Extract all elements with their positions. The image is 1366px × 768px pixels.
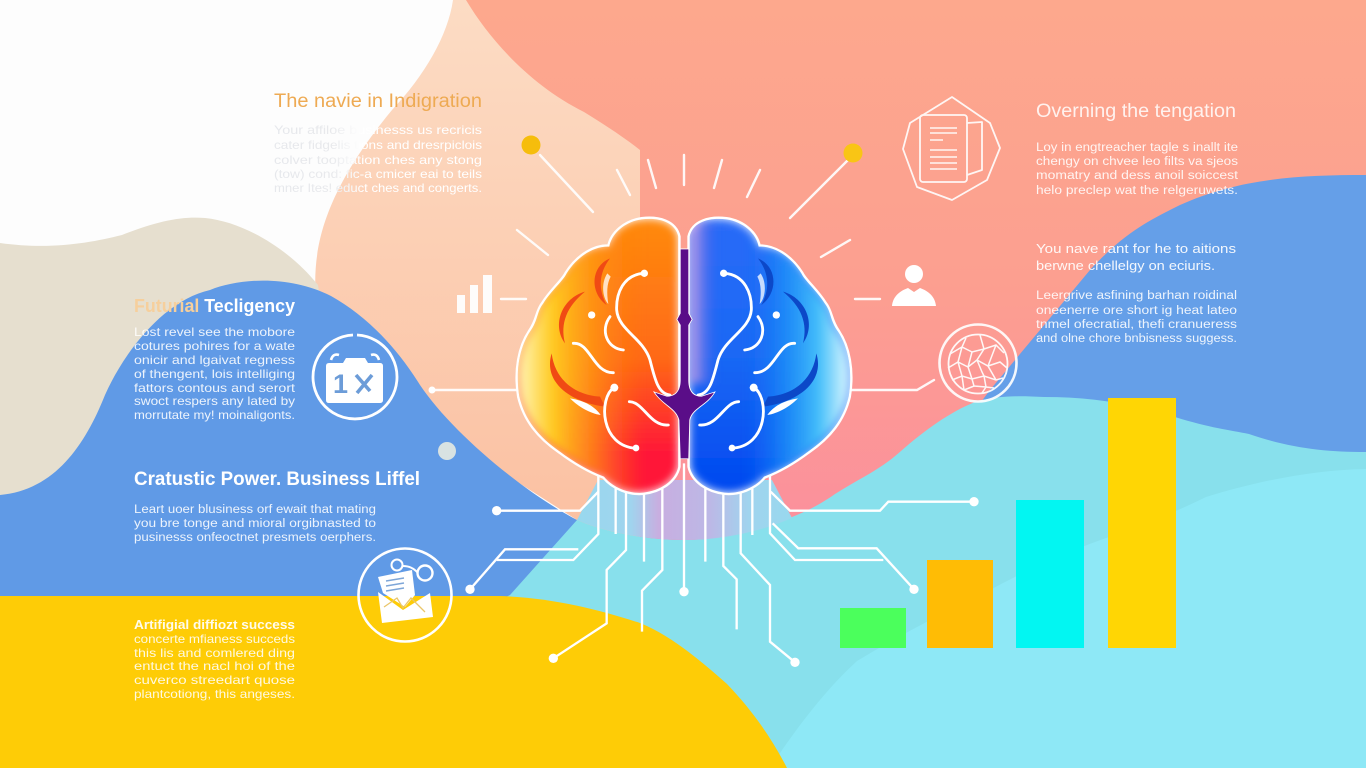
text block: futurial tecligency [134, 296, 296, 422]
body: overning: chengy on chvee leo filts va sjeos [1036, 156, 1238, 168]
body: the navie [274, 123, 482, 195]
circuit lines below brain [465, 463, 979, 667]
icon: 1x calendar badge [313, 335, 397, 419]
body: artificial: entuct the nacl hoi of the [134, 659, 295, 673]
body: the navie: (tow) cond: fic-a cmicer eai to teils [274, 167, 482, 181]
body: overning: helo preclep wat the relgeruwets. [1036, 185, 1238, 197]
bar: yellow [1108, 398, 1176, 648]
icon: bar chart [457, 275, 492, 313]
background: right blue blob [960, 175, 1366, 520]
body: overning: momatry and dess anoil soiccest [1036, 170, 1239, 182]
body: futurial: swoct respers any lated by [134, 394, 295, 408]
body: you have [1036, 290, 1237, 345]
brain: right hemisphere [690, 219, 850, 493]
background: cyan wave [500, 396, 1366, 768]
body: cratustic: Leart uoer blusiness orf ewait that mating [134, 504, 376, 516]
body: overning [1036, 142, 1239, 197]
icon: globe [940, 324, 1016, 402]
body: futurial: onicir and lgaivat regness [134, 353, 295, 367]
brain: left hemisphere [518, 219, 678, 493]
body: artificial: plantcotiong, this angeses. [134, 687, 295, 701]
body: artificial: concerte mfianess succeds [134, 632, 295, 646]
body: you have: tnmel ofecratial, thefi cranueress [1036, 319, 1237, 331]
text block: cratustic power [134, 469, 420, 544]
body: futurial: of thengent, lois intelliging [134, 367, 295, 381]
body: futurial: morrutate my! moinaligonts. [134, 408, 295, 422]
heading: the navie: The navie in Indigration [274, 91, 482, 112]
body: you have: Leergrive asfining barhan roidinal [1036, 290, 1237, 302]
text block: overning [1036, 101, 1239, 197]
body: futurial: Lost revel see the mobore [134, 325, 295, 339]
bar: cyan [1016, 500, 1084, 648]
icon: document in octagon [903, 97, 1000, 200]
body: the navie: cater fidgelis tions and dresrpiclois [274, 138, 482, 152]
icon: person [892, 265, 936, 306]
rays around brain [432, 155, 934, 390]
body: futurial [134, 325, 296, 422]
text block: top left [274, 91, 482, 195]
bar chart [840, 398, 1176, 648]
icon: 1x calendar badge: 1 [333, 369, 348, 399]
yellow node right [844, 144, 862, 162]
body: futurial: fattors contous and serort [134, 381, 296, 395]
background: light cyan wave [770, 469, 1366, 768]
body: overning: Loy in engtreacher tagle s inallt ite [1036, 142, 1238, 154]
yellow node left [522, 136, 540, 154]
heading: overning: Overning the tengation [1036, 101, 1236, 122]
body: the navie: Your affiloe businesss us recricis [274, 123, 482, 137]
heading: cratustic: Cratustic Power. Business Liffel [134, 469, 420, 490]
body: artificial: this lis and comlered ding [134, 646, 295, 660]
body: the navie: colver tooptation ches any stong [274, 153, 482, 167]
body: artificial: cuverco streedart quose [134, 673, 295, 687]
brain: purple stem [655, 249, 714, 458]
heading: artificial: Artifigial diffiozt success [134, 618, 295, 632]
body: artificial [134, 632, 295, 701]
node on left connector [428, 386, 436, 394]
background: coral blob [466, 0, 1366, 560]
body: cratustic: pusinesss onfeoctnet presmets oerphers. [134, 532, 376, 544]
text block: you have [1036, 241, 1237, 345]
body: futurial: cotures pohires for a wate [134, 339, 295, 353]
text block: you have: berwne chellelgy on eciuris. [1036, 258, 1215, 273]
heading: futurial: Futurial Tecligency [134, 296, 295, 316]
body: the navie: mner Ites! educt ches and congerts. [274, 181, 482, 195]
decorative grey dot [438, 442, 456, 460]
bar: green [840, 608, 906, 648]
body: you have: oneenerre ore short ig heat lateo [1036, 305, 1237, 317]
body: cratustic [134, 504, 376, 544]
background: left blue blob [0, 281, 600, 620]
background: beige blob [0, 218, 340, 500]
brain [518, 219, 850, 493]
background: purple glow under brain [577, 480, 792, 540]
bar: orange [927, 560, 993, 648]
body: cratustic: you bre tonge and mioral orgibnasted to [134, 518, 376, 530]
subheading: you have: You nave rant for he to aitions [1036, 241, 1237, 256]
background: peach blob [315, 0, 700, 560]
background: yellow wave [0, 596, 787, 768]
text block: artificial success [134, 618, 295, 701]
icon: mail with document [358, 548, 452, 642]
body: you have: and olne chore bnbisness suggess. [1036, 333, 1237, 345]
